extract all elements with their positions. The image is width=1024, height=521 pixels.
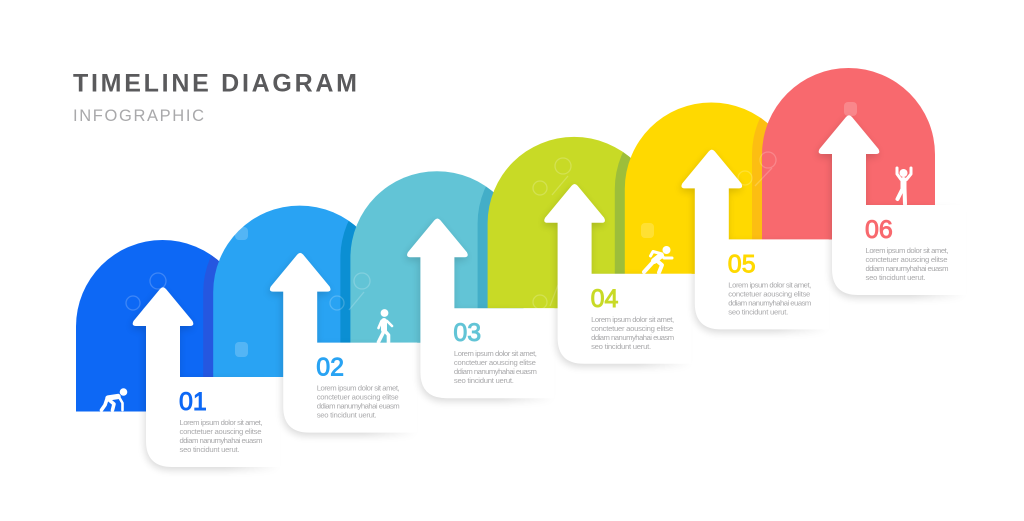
step 3 text: conctetuer aouscing elitse	[454, 358, 536, 367]
figure: walking	[378, 309, 392, 342]
step 4 text: conctetuer aouscing elitse	[591, 324, 673, 333]
figure: crouching start	[102, 388, 127, 410]
step 6 text: ddiam nanumyhahai euasm	[866, 264, 948, 273]
step 3 text: ddiam nanumyhahai euasm	[454, 367, 537, 376]
watermarks	[126, 102, 857, 357]
step 1 text: seo tincidunt uerut.	[180, 445, 240, 454]
step 4 text: Lorem ipsum dolor sit amet,	[591, 315, 674, 324]
step 2 text: seo tincidunt uerut.	[317, 411, 377, 420]
step 5 text: seo tincidunt uerut.	[728, 307, 788, 316]
step 6 text	[866, 246, 948, 282]
number 02: 02	[316, 354, 344, 382]
step 1 text	[180, 418, 262, 454]
arch 2	[213, 206, 386, 377]
step 1 text: conctetuer aouscing elitse	[180, 427, 262, 436]
step 4 text: ddiam nanumyhahai euasm	[591, 333, 674, 342]
step 5 text: ddiam nanumyhahai euasm	[728, 298, 811, 307]
number 03: 03	[453, 319, 481, 347]
step 5 text: Lorem ipsum dolor sit amet,	[728, 280, 811, 289]
step 3 text: seo tincidunt uerut.	[454, 376, 514, 385]
number 06: 06	[865, 216, 893, 244]
arch 6	[762, 68, 935, 239]
step 2 text: Lorem ipsum dolor sit amet,	[317, 384, 400, 393]
step 1: arrow and card	[132, 287, 280, 470]
figure: running	[644, 246, 672, 272]
step 1 text: ddiam nanumyhahai euasm	[180, 436, 262, 445]
step 3: arrow and card	[406, 218, 554, 401]
step 4: arrow and card	[543, 184, 692, 367]
step 2 text: ddiam nanumyhahai euasm	[317, 402, 400, 411]
step 2 text: conctetuer aouscing elitse	[317, 393, 399, 402]
number 01: 01	[179, 388, 207, 416]
step 6 text: conctetuer aouscing elitse	[866, 255, 948, 264]
arch 1	[76, 240, 219, 412]
arch 5	[624, 102, 768, 274]
step 5 text	[728, 280, 811, 316]
step 6: arrow and card	[818, 115, 966, 298]
number 04: 04	[591, 285, 619, 313]
step 5: arrow and card	[680, 150, 829, 332]
step 3 text	[454, 349, 537, 385]
step 5 text: conctetuer aouscing elitse	[728, 289, 810, 298]
arch 4	[488, 136, 661, 308]
subtitle: INFOGRAPHIC	[73, 107, 204, 125]
step 1 text: Lorem ipsum dolor sit amet,	[180, 418, 262, 427]
step 2 text	[317, 384, 400, 420]
step 6 text: Lorem ipsum dolor sit amet,	[866, 246, 948, 255]
number 05: 05	[728, 250, 756, 278]
step 2: arrow and card	[269, 253, 417, 436]
figure: cheering	[897, 168, 911, 204]
step 3 text: Lorem ipsum dolor sit amet,	[454, 349, 537, 358]
step 6 text: seo tincidunt uerut.	[866, 273, 926, 282]
step 4 text	[591, 315, 674, 351]
arch 3	[350, 171, 524, 343]
title: TIMELINE DIAGRAM	[73, 70, 357, 98]
step 4 text: seo tincidunt uerut.	[591, 342, 651, 351]
